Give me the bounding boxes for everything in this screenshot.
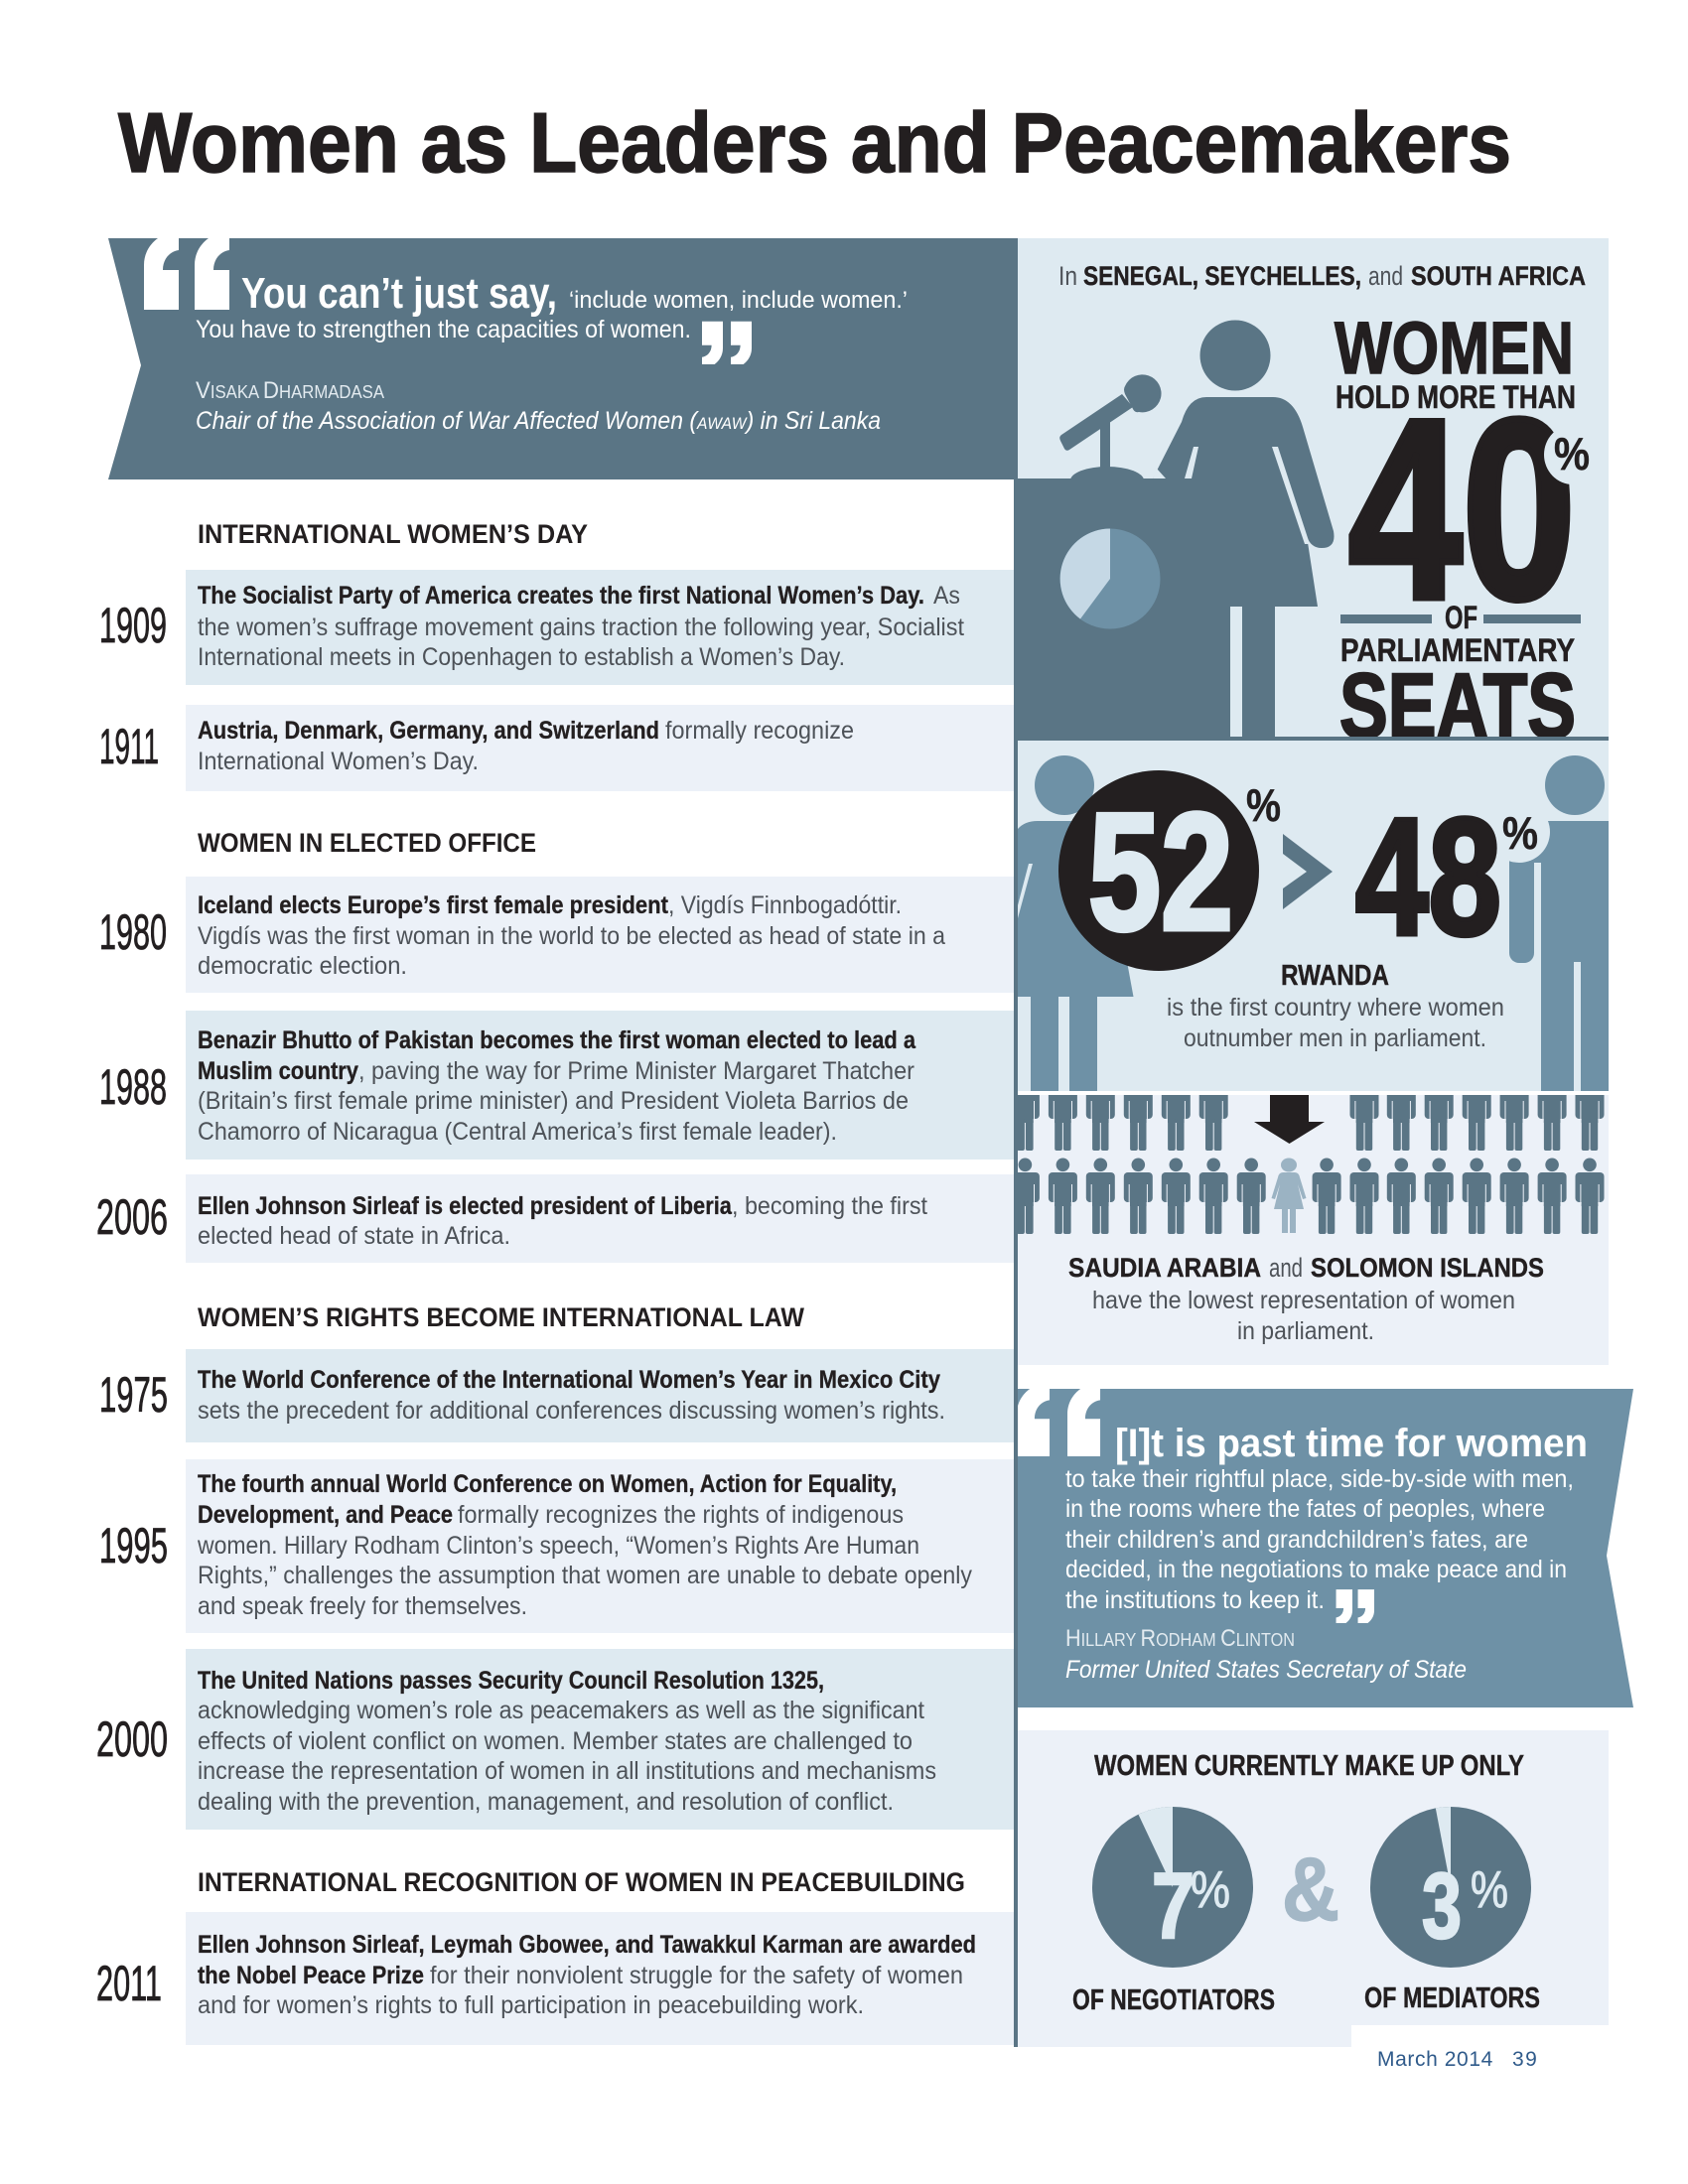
quote body: decided, in the negotiations to make peace and in	[1065, 1556, 1567, 1583]
icon: crowd of men, bottom row	[1011, 1158, 1605, 1234]
icon: down arrow	[1254, 1095, 1325, 1144]
title: Women as Leaders and Peacemakers	[118, 96, 1511, 191]
icon: man figure	[1488, 755, 1609, 1091]
center vertical rule	[1014, 478, 1018, 2047]
chart: lectern pie 40 percent	[1060, 528, 1160, 629]
row: 2011: 2011	[96, 1956, 162, 2011]
row: 1995: The fourth annual World Conference on Women, Action for Equality,	[198, 1470, 897, 1498]
row: 1980: democratic election.	[198, 952, 407, 980]
row: 2006	[96, 1174, 1014, 1263]
chart: 7 percent pie	[1092, 1807, 1253, 1968]
stat: seats: SEATS	[1339, 654, 1576, 757]
quote continuation: ‘include women, include women.’	[569, 287, 908, 314]
icon: closing quotation mark	[702, 322, 752, 364]
caption: Saudi Arabia and Solomon Islands: SAUDIA ARABIA	[1068, 1253, 1261, 1283]
row: 2006: , becoming the first	[732, 1192, 927, 1220]
quote lead: [I]t is past time for women	[1115, 1422, 1588, 1465]
caption: Rwanda: outnumber men in parliament.	[1184, 1024, 1486, 1052]
quote body	[1065, 1465, 1574, 1614]
row: 2011: and for women’s rights to full participation in peacebuilding work.	[198, 1991, 864, 2019]
caption: Rwanda: is the first country where women	[1167, 994, 1504, 1022]
stat: 52 percent: %	[1246, 779, 1281, 831]
stat: 48 percent: 48	[1355, 783, 1501, 970]
row: 2011	[96, 1912, 1014, 2045]
heading: Senegal, Seychelles and South Africa: SOUTH AFRICA	[1411, 261, 1586, 291]
row: 1909	[99, 570, 1014, 685]
panel: parliament 40 percent	[1014, 238, 1609, 757]
stat: 48 percent: %	[1502, 807, 1538, 859]
caption: Saudi Arabia and Solomon Islands	[1068, 1253, 1544, 1345]
icon: opening quotation mark	[1017, 1389, 1100, 1456]
section: International Women's Day	[99, 519, 1014, 791]
chart: 7 percent pie: 7	[1152, 1853, 1195, 1958]
row: 1975	[99, 1349, 1014, 1442]
heading: Senegal, Seychelles and South Africa	[1058, 261, 1586, 291]
panel: Clinton quote banner	[1017, 1389, 1633, 1707]
icon: woman figure	[1018, 755, 1134, 1091]
row: 2011: Ellen Johnson Sirleaf, Leymah Gbowee, and Tawakkul Karman are awarded	[198, 1931, 976, 1959]
percent cut-out: %	[1554, 428, 1590, 479]
label: of mediators: OF MEDIATORS	[1364, 1982, 1540, 2014]
caption: Saudi Arabia and Solomon Islands: have the lowest representation of women	[1092, 1287, 1515, 1314]
heading: WOMEN IN ELECTED OFFICE	[198, 828, 536, 858]
chart: 3 percent pie	[1370, 1807, 1531, 1968]
label: of negotiators: OF NEGOTIATORS	[1072, 1984, 1275, 2016]
quote body: to take their rightful place, side-by-side with men,	[1065, 1465, 1574, 1493]
row: 1995: women. Hillary Rodham Clinton’s speech, “Women’s Rights Are Human	[197, 1532, 919, 1560]
row: 2011: for their nonviolent struggle for the safety of women	[430, 1962, 963, 1989]
quote second line: You have to strengthen the capacities of women.	[196, 316, 691, 343]
caption: Saudi Arabia and Solomon Islands: SOLOMON ISLANDS	[1311, 1253, 1544, 1283]
quote body: in the rooms where the fates of peoples, where	[1065, 1495, 1545, 1523]
row: 2000: 2000	[96, 1711, 168, 1767]
row: 1980: , Vigdís Finnbogadóttir.	[668, 891, 902, 919]
heading: WOMEN CURRENTLY MAKE UP ONLY	[1094, 1750, 1524, 1782]
row: 2000: The United Nations passes Security Council Resolution 1325,	[198, 1667, 824, 1695]
panel: Rwanda comparison	[1018, 737, 1609, 1091]
quote attribution title: Former United States Secretary of State	[1065, 1656, 1467, 1684]
quote attribution title: Chair of the Association of War Affected Women (AWAW) in Sri Lanka	[196, 407, 881, 435]
chart: 3 percent pie: 3	[1422, 1853, 1462, 1958]
row: 2000: acknowledging women’s role as peacemakers as well as the significant	[198, 1697, 924, 1724]
row: 1988	[99, 1011, 1014, 1160]
row: 1975: The World Conference of the International Women’s Year in Mexico City	[198, 1366, 940, 1394]
quote body: the institutions to keep it.	[1065, 1586, 1325, 1614]
row: 1909: the women’s suffrage movement gains traction the following year, Socialist	[198, 614, 964, 641]
row: 1988: Muslim country	[198, 1057, 358, 1085]
heading: INTERNATIONAL RECOGNITION OF WOMEN IN PEACEBUILDING	[198, 1867, 965, 1897]
stat: women: WOMEN	[1335, 307, 1574, 389]
row: 1980: 1980	[99, 904, 167, 960]
row: 1988: (Britain’s first female prime minister) and President Violeta Barrios de	[198, 1087, 909, 1115]
stat: parliamentary: PARLIAMENTARY	[1340, 632, 1575, 668]
row: 1995: Development, and Peace	[198, 1501, 453, 1529]
row: 1988: Chamorro of Nicaragua (Central America’s first female leader).	[198, 1118, 837, 1146]
chart: 3 percent pie: %	[1471, 1861, 1508, 1919]
row: 1995: formally recognizes the rights of indigenous	[458, 1501, 904, 1529]
quote attribution name: VISAKA DHARMADASA	[196, 377, 384, 404]
row: 2011: the Nobel Peace Prize	[198, 1962, 424, 1989]
row: 2000: increase the representation of women in all institutions and mechanisms	[198, 1757, 936, 1785]
icon: opening quotation mark	[144, 238, 229, 310]
panel: negotiators and mediators	[1018, 1730, 1609, 2047]
row: 2000: effects of violent conflict on women. Member states are challenged to	[198, 1727, 913, 1755]
section: Women's Rights Become International Law	[96, 1302, 1014, 1830]
caption: Rwanda	[1167, 960, 1504, 1052]
row: 2000	[96, 1649, 1014, 1830]
row: 1995: and speak freely for themselves.	[198, 1592, 527, 1620]
caption: Saudi Arabia and Solomon Islands: and	[1269, 1253, 1303, 1283]
icon: microphone	[1059, 374, 1162, 494]
icon: woman speaking at lectern	[1014, 320, 1335, 740]
row: 1988: , paving the way for Prime Minister Margaret Thatcher	[358, 1057, 914, 1085]
heading: Senegal, Seychelles and South Africa: In	[1058, 261, 1077, 291]
row: 1975: sets the precedent for additional conferences discussing women’s rights.	[198, 1397, 945, 1425]
row: 1995	[99, 1459, 1014, 1633]
icon: closing quotation mark	[1336, 1589, 1374, 1623]
caption: Rwanda: RWANDA	[1281, 960, 1389, 992]
row: 1988: 1988	[99, 1059, 167, 1115]
stat: hold more than: HOLD MORE THAN	[1336, 379, 1576, 415]
row: 1911	[99, 705, 1014, 791]
panel: lowest representation	[1011, 1074, 1609, 1365]
row: 1909: As	[933, 582, 960, 610]
row: 2000: dealing with the prevention, management, and resolution of conflict.	[198, 1788, 894, 1816]
row: 1980	[99, 877, 1014, 993]
row: 1911: 1911	[99, 719, 159, 774]
section: Women in Elected Office	[96, 828, 1014, 1263]
row: 2006: Ellen Johnson Sirleaf is elected president of Liberia	[198, 1192, 733, 1220]
row: 1909: International meets in Copenhagen to establish a Women’s Day.	[198, 643, 845, 671]
quote lead: You can’t just say,	[241, 269, 557, 318]
row: 1995: 1995	[99, 1518, 168, 1573]
row: 1911: Austria, Denmark, Germany, and Switzerland	[198, 717, 659, 745]
row: 1995: Rights,” challenges the assumption that women are unable to debate openly	[198, 1562, 972, 1589]
heading: WOMEN’S RIGHTS BECOME INTERNATIONAL LAW	[198, 1302, 804, 1332]
footer: date and page number: March 2014	[1377, 2048, 1493, 2071]
icon: greater-than chevron	[1283, 834, 1333, 909]
row: 1911: International Women’s Day.	[198, 748, 479, 775]
row: 1909: The Socialist Party of America creates the first National Women’s Day.	[198, 582, 924, 610]
section: International Recognition of Women in Peacebuilding	[96, 1867, 1014, 2045]
row: 1988: Benazir Bhutto of Pakistan becomes the first woman elected to lead a	[198, 1026, 916, 1054]
heading: INTERNATIONAL WOMEN’S DAY	[198, 519, 588, 549]
row: 2006: elected head of state in Africa.	[198, 1222, 510, 1250]
ampersand: &	[1282, 1841, 1339, 1940]
heading: Senegal, Seychelles and South Africa: SENEGAL, SEYCHELLES,	[1083, 261, 1361, 291]
row: 1909: 1909	[99, 598, 167, 653]
heading: Senegal, Seychelles and South Africa: and	[1368, 261, 1403, 291]
icon: lone woman	[1271, 1158, 1307, 1233]
"of" divider	[1340, 600, 1581, 635]
"of" divider: OF	[1445, 600, 1477, 635]
stat: 40: 40	[1348, 365, 1576, 652]
percent cut-out	[1544, 425, 1602, 484]
row: 1911: formally recognize	[665, 717, 854, 745]
row: 1980: Vigdís was the first woman in the world to be elected as head of state in a	[198, 922, 945, 950]
caption: Saudi Arabia and Solomon Islands: in parliament.	[1237, 1317, 1374, 1345]
row: 2006: 2006	[96, 1189, 168, 1245]
panel: Dharmadasa quote banner	[108, 238, 1018, 479]
row: 1980: Iceland elects Europe’s first female president	[198, 891, 669, 919]
icon: crowd of men, top row	[1018, 1095, 1605, 1151]
stat: 52 percent: 52	[1088, 778, 1233, 965]
row: 1975: 1975	[99, 1367, 168, 1423]
quote body: their children’s and grandchildren’s fates, are	[1065, 1526, 1528, 1554]
footer: date and page number: 39	[1512, 2048, 1538, 2071]
quote attribution name: HILLARY RODHAM CLINTON	[1065, 1625, 1295, 1652]
chart: 7 percent pie: %	[1191, 1861, 1230, 1919]
